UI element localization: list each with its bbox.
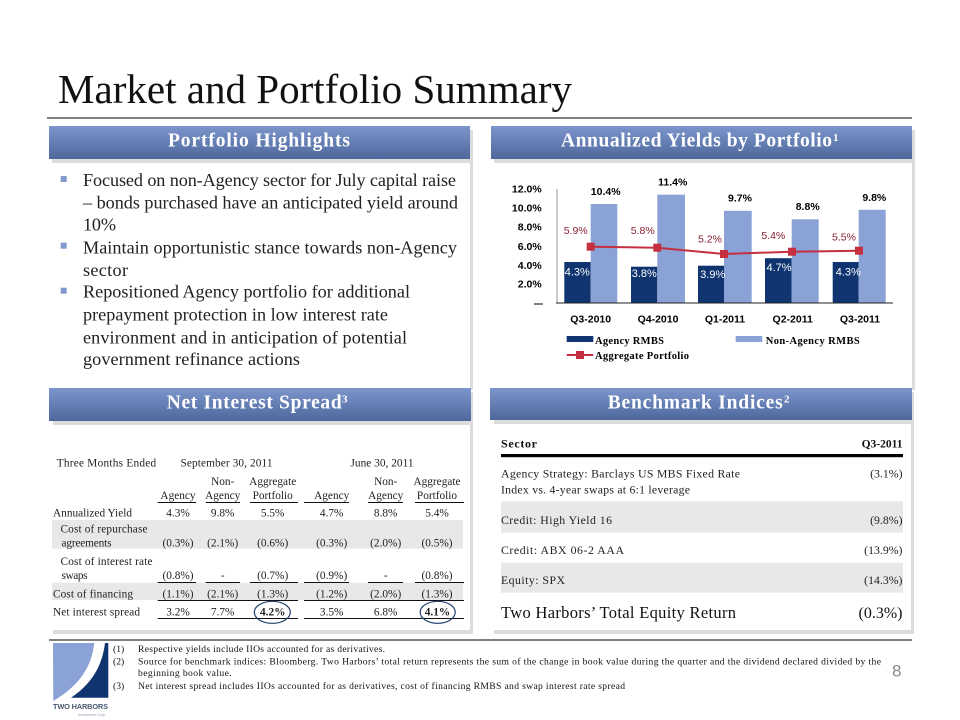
table: net interest spread: - (221, 570, 225, 582)
agency labels: 4.3% (565, 267, 590, 279)
table: net interest spread: (0.6%) (257, 538, 288, 550)
table: net interest spread: (2.1%) (207, 589, 238, 601)
heading: net interest spread (49, 388, 471, 421)
footer rule (49, 639, 912, 641)
aggregate labels: 5.8% (631, 225, 655, 237)
table: net interest spread: (1.3%) (421, 589, 453, 601)
table: net interest spread: Net interest spread (53, 607, 140, 619)
panel: annualized yields (491, 126, 915, 390)
non-agency bars (591, 195, 886, 303)
bullet list: Repositioned Agency portfolio for additional (83, 282, 410, 302)
table: benchmark indices: Equity: SPX (501, 573, 565, 587)
table: net interest spread: (0.8%) (421, 570, 453, 582)
table: net interest spread: 8.8% (374, 508, 398, 520)
heading: annualized yields (491, 126, 912, 159)
callout: 4.1% circle (420, 601, 455, 623)
footnotes: beginning book value. (138, 668, 232, 679)
table: net interest spread: (0.3%) (316, 538, 347, 550)
bullet list: – bonds purchased have an anticipated yield around (82, 193, 458, 213)
category labels: Q3-2011 (840, 314, 880, 326)
table: benchmark indices: Credit: High Yield 16 (501, 513, 612, 527)
table: net interest spread: (0.5%) (421, 538, 453, 550)
table: net interest spread: (1.1%) (162, 589, 194, 601)
table: net interest spread: 4.3% (166, 508, 190, 520)
heading: annualized yields: 1 (833, 132, 838, 144)
table: net interest spread: (0.8%) (162, 570, 194, 582)
aggregate labels: 5.9% (564, 225, 588, 237)
aggregate line (587, 243, 863, 258)
footnotes (113, 644, 881, 692)
panel: portfolio highlights (49, 126, 473, 390)
y axis labels: 12.0% (512, 183, 542, 195)
table: net interest spread: (2.0%) (370, 538, 401, 550)
table: net interest spread: (2.0%) (370, 589, 401, 601)
table: net interest spread: Cost of financing (53, 589, 133, 601)
y axis labels: 2.0% (518, 279, 542, 291)
table: net interest spread: Agency (160, 490, 196, 502)
table: net interest spread: Non- (211, 476, 235, 488)
non-agency labels: 8.8% (796, 201, 820, 213)
table: net interest spread: Portfolio (417, 490, 457, 502)
table: net interest spread: Portfolio (253, 490, 293, 502)
callout: 4.2% circle (254, 601, 290, 623)
y axis labels: 10.0% (512, 203, 542, 215)
aggregate labels (564, 225, 856, 246)
table: net interest spread: (1.3%) (257, 589, 288, 601)
category labels: Q4-2010 (638, 314, 679, 326)
table: net interest spread: Agency (205, 490, 241, 502)
legend: Non-Agency RMBS (766, 336, 860, 347)
non-agency labels: 10.4% (591, 186, 621, 198)
bullet list: environment and in anticipation of potential (83, 327, 407, 347)
table: benchmark indices: Sector (501, 436, 538, 450)
heading: benchmark indices (490, 388, 912, 420)
bullet list: 10% (83, 215, 116, 235)
aggregate labels: 5.2% (698, 234, 722, 246)
logo: two harbors: TWO HARBORS (53, 702, 108, 711)
table: net interest spread: Annualized Yield (53, 508, 132, 520)
table: benchmark indices: (9.8%) (870, 513, 903, 527)
table: net interest spread: Cost of interest rate (60, 556, 152, 568)
title: Market and Portfolio Summary (58, 66, 572, 112)
table: net interest spread: 6.8% (374, 607, 398, 619)
table: net interest spread: (1.2%) (316, 589, 347, 601)
y axis labels: 6.0% (518, 241, 542, 253)
bullet list: government refinance actions (83, 349, 300, 369)
table: net interest spread: - (384, 570, 388, 582)
table: net interest spread: 4.1% (425, 607, 450, 619)
table: benchmark indices: (13.9%) (864, 543, 903, 557)
table: benchmark indices: (0.3%) (859, 605, 902, 622)
table: benchmark indices: (14.3%) (864, 573, 903, 587)
heading: annualized yields: Annualized Yields by Portfolio (561, 131, 832, 152)
heading: benchmark indices: 2 (784, 394, 790, 406)
table: net interest spread: June 30, 2011 (350, 458, 414, 470)
heading: net interest spread: Net Interest Spread (167, 392, 342, 413)
agency labels: 3.8% (632, 268, 657, 280)
bullet list: prepayment protection in low interest rate (83, 305, 388, 325)
agency labels: 4.3% (836, 267, 861, 279)
footnotes: Net interest spread includes IIOs accounted for as derivatives, cost of financing RMBS and swap interest rate spread (138, 681, 625, 692)
footnotes: (1) (113, 644, 124, 655)
logo: two harbors (53, 643, 108, 717)
y axis labels: 4.0% (518, 260, 542, 272)
category labels: Q2-2011 (773, 314, 813, 326)
bar chart: yields by quarter (512, 177, 893, 362)
aggregate labels: 5.4% (761, 230, 785, 242)
table: net interest spread: 4.2% (260, 607, 285, 619)
table: net interest spread: Aggregate (413, 476, 461, 488)
table: net interest spread: agreements (62, 538, 112, 550)
table: net interest spread: Agency (314, 490, 350, 502)
table: net interest spread: 5.4% (425, 508, 449, 520)
table: net interest spread: Aggregate (249, 476, 296, 488)
table: benchmark indices: (3.1%) (870, 466, 903, 480)
heading: portfolio highlights (49, 126, 470, 159)
bullet list (61, 170, 458, 369)
table: net interest spread: (0.9%) (316, 570, 347, 582)
table: benchmark indices: Agency Strategy: Barclays US MBS Fixed Rate (501, 466, 740, 480)
aggregate labels: 5.5% (832, 232, 856, 244)
table: net interest spread: September 30, 2011 (180, 458, 272, 470)
agency labels: 4.7% (766, 262, 792, 274)
category labels: Q3-2010 (570, 314, 611, 326)
logo: two harbors: Investment Corp. (78, 712, 106, 717)
table: net interest spread: 7.7% (211, 607, 235, 619)
heading: net interest spread: 3 (342, 394, 348, 406)
table: benchmark indices (501, 436, 903, 622)
non-agency labels: 11.4% (658, 177, 688, 189)
footnotes: (2) (113, 656, 124, 667)
agency labels (565, 262, 861, 281)
table: net interest spread: 3.5% (320, 607, 344, 619)
category labels (570, 314, 880, 326)
agency labels: 3.9% (700, 269, 725, 281)
page number: 8 (892, 662, 901, 681)
non-agency labels: 9.7% (728, 193, 753, 205)
non-agency labels (591, 177, 887, 213)
table: net interest spread: Three Months Ended (57, 458, 157, 470)
table: net interest spread: 5.5% (261, 508, 285, 520)
y axis labels: 8.0% (518, 222, 542, 234)
panel: benchmark indices (490, 388, 914, 634)
y axis labels (512, 183, 543, 304)
table: benchmark indices: Index vs. 4-year swaps at 6:1 leverage (501, 482, 690, 496)
table: net interest spread: 3.2% (166, 607, 190, 619)
table: net interest spread: Agency (368, 490, 404, 502)
table: net interest spread: 9.8% (211, 508, 235, 520)
heading: benchmark indices: Benchmark Indices (608, 392, 783, 413)
table: net interest spread: swaps (62, 570, 88, 582)
table: benchmark indices: Two Harbors’ Total Equity Return (501, 603, 736, 622)
legend: Agency RMBS (595, 336, 664, 347)
table: benchmark indices: Credit: ABX 06-2 AAA (501, 543, 624, 557)
bullet list: Focused on non-Agency sector for July capital raise (83, 170, 456, 190)
non-agency labels: 9.8% (862, 192, 887, 204)
agency bars (564, 258, 859, 303)
footnotes: Source for benchmark indices: Bloomberg. Two Harbors’ total return represents the sum of the change in book value during the quarter and the dividend declared divided by the (138, 656, 881, 667)
table: net interest spread: (2.1%) (207, 538, 238, 550)
table: net interest spread: 4.7% (320, 508, 344, 520)
footnotes: Respective yields include IIOs accounted for as derivatives. (138, 644, 385, 655)
table: net interest spread: Cost of repurchase (60, 524, 148, 536)
heading: portfolio highlights: Portfolio Highlights (168, 131, 350, 152)
footnotes: (3) (113, 681, 124, 692)
bullet list: Maintain opportunistic stance towards non-Agency (83, 237, 458, 257)
legend (567, 336, 860, 362)
table: net interest spread (52, 458, 464, 623)
bullet list: sector (83, 260, 128, 280)
legend: Aggregate Portfolio (595, 351, 689, 362)
table: net interest spread: Non- (374, 476, 398, 488)
panel: net interest spread (49, 388, 473, 634)
table: benchmark indices: Q3-2011 (862, 438, 903, 450)
category labels: Q1-2011 (705, 314, 745, 326)
table: net interest spread: (0.3%) (162, 538, 194, 550)
table: net interest spread: (0.7%) (257, 570, 288, 582)
